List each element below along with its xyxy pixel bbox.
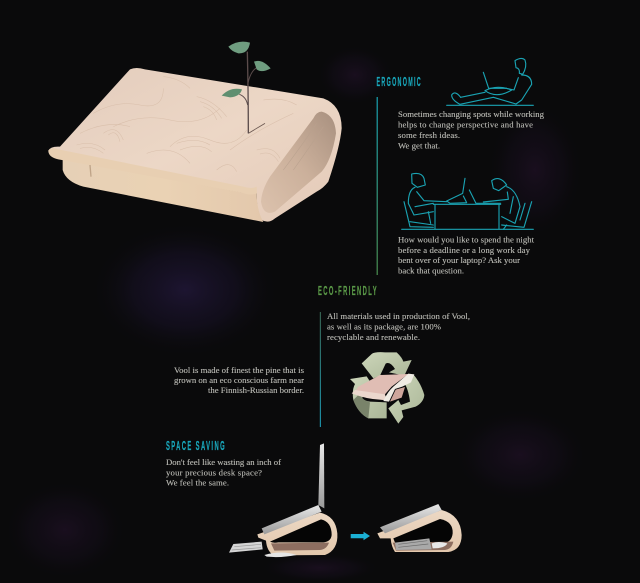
- text: eco-friendly left paragraph: the Finnish-Russian border.: [208, 385, 304, 395]
- text: ergonomic paragraph one: helps to change perspective and have: [398, 120, 533, 130]
- text: SPACE SAVING: [166, 439, 226, 453]
- left arrow: [350, 376, 387, 418]
- stand top surface: [355, 374, 408, 395]
- text: ergonomic paragraph one: some fresh ideas.: [398, 130, 460, 140]
- text: eco-friendly right paragraph: [327, 311, 470, 342]
- front lip: [48, 148, 257, 195]
- text: ergonomic paragraph two: bent over of your laptop? Ask your: [398, 255, 520, 265]
- wood grain: [77, 77, 323, 177]
- stand white rim: [383, 374, 414, 402]
- text: space saving paragraph: We feel the same.: [166, 478, 229, 488]
- stand opening: [390, 387, 405, 402]
- text: eco-friendly left paragraph: Vool is made of finest the pine that is: [174, 365, 305, 375]
- text: ergonomic paragraph two: [398, 234, 535, 276]
- text: space saving paragraph: your precious desk space?: [166, 468, 262, 478]
- plant: [222, 42, 271, 133]
- text: eco-friendly right paragraph: All materials used in production of Vool,: [327, 311, 470, 321]
- divider: eco-friendly column: [320, 312, 321, 427]
- text: ERGONOMIC: [376, 75, 422, 89]
- top arrow: [362, 352, 412, 378]
- icon: recycling arrows around a stand: [350, 352, 424, 424]
- text: ECO-FRIENDLY: [318, 284, 378, 298]
- text: ergonomic paragraph two: before a deadline or a long work day: [398, 245, 531, 255]
- inner shadow of left arrow: [353, 393, 370, 418]
- text: eco-friendly left paragraph: [174, 365, 305, 395]
- icon: two people working at a table: [402, 173, 533, 229]
- arrow: [351, 532, 370, 540]
- text: eco-friendly left paragraph: grown on an eco conscious farm near: [174, 375, 304, 385]
- text: ergonomic paragraph one: Sometimes changing spots while working: [398, 109, 545, 119]
- right arrow: [388, 374, 424, 424]
- stand with laptop open and accessories outside: [229, 443, 337, 557]
- text: eco-friendly right paragraph: recyclable and renewable.: [327, 332, 420, 342]
- divider: ergonomic column: [377, 97, 378, 275]
- text: space saving paragraph: [166, 457, 281, 488]
- icon: person reclining with laptop: [447, 58, 533, 105]
- stand front edge: [352, 390, 387, 400]
- text: ergonomic paragraph one: We get that.: [398, 140, 440, 150]
- side opening: [261, 112, 336, 213]
- stand body: [48, 68, 342, 222]
- text: space saving paragraph: Don't feel like wasting an inch of: [166, 457, 281, 467]
- stand with laptop and stored accessories: [377, 504, 462, 552]
- text: ergonomic paragraph one: [398, 109, 545, 150]
- text: ergonomic paragraph two: How would you like to spend the night: [398, 234, 535, 244]
- front face lower panel: [63, 159, 263, 222]
- wooden laptop stand with sprouting plant: [48, 42, 342, 222]
- text: ergonomic paragraph two: back that question.: [398, 266, 464, 276]
- text: eco-friendly right paragraph: as well as its package, are 100%: [327, 322, 441, 332]
